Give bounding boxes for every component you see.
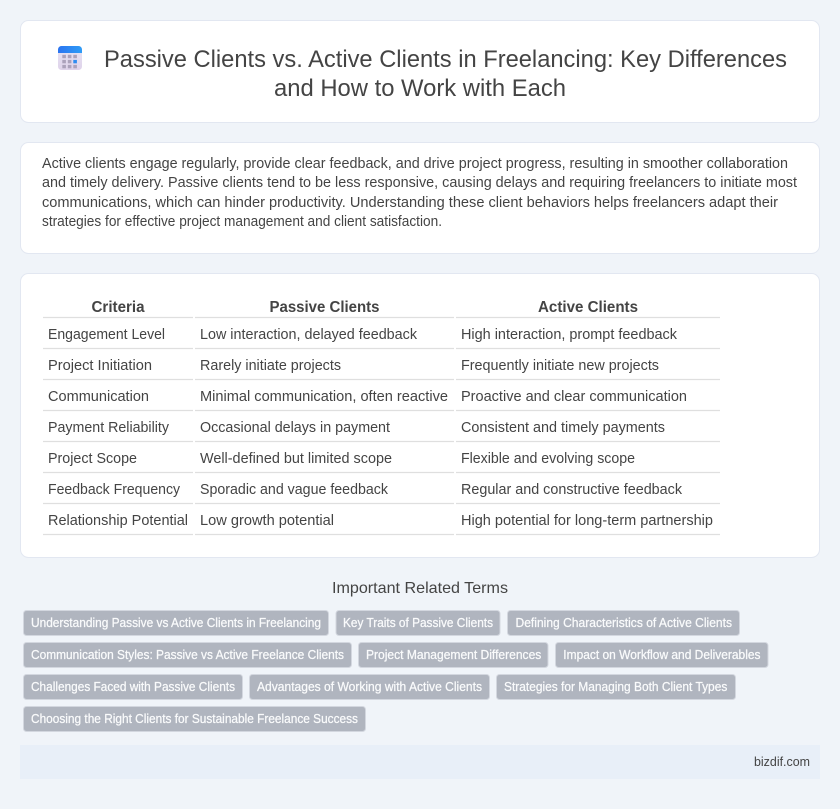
tag: Impact on Workflow and Deliverables — [563, 648, 760, 662]
row: project scope — [48, 451, 635, 467]
tag — [250, 674, 490, 700]
tag: Choosing the Right Clients for Sustainable Freelance Success — [31, 712, 358, 726]
row: communication: Communication — [48, 389, 149, 405]
table header: Passive Clients — [270, 299, 380, 316]
tag: Understanding Passive vs Active Clients in Freelancing — [31, 616, 321, 630]
panel: title header — [20, 20, 820, 122]
text block: introduction paragraph — [42, 156, 797, 230]
tag — [24, 674, 242, 700]
tag: Challenges Faced with Passive Clients — [31, 680, 235, 694]
row: relationship potential: High potential for long-term partnership — [461, 513, 713, 529]
row: relationship potential: Low growth potential — [200, 513, 334, 529]
tag group: related terms — [24, 610, 768, 732]
table header — [92, 299, 638, 316]
row: feedback frequency: Sporadic and vague feedback — [200, 482, 389, 498]
row: relationship potential: Relationship Potential — [48, 513, 188, 529]
table header: Active Clients — [538, 299, 638, 316]
row: communication — [48, 389, 687, 405]
row: project scope: Project Scope — [48, 451, 137, 467]
footer bar: bizdif.com — [754, 754, 810, 769]
row: engagement level: Engagement Level — [48, 327, 165, 343]
row: engagement level: High interaction, prompt feedback — [461, 327, 678, 343]
panel: introduction — [20, 142, 820, 254]
heading: important related terms: Important Related Terms — [332, 580, 508, 597]
row: engagement level — [48, 327, 678, 343]
tag — [24, 610, 328, 636]
tag — [508, 610, 740, 636]
text block: introduction paragraph: and timely delivery. Passive clients tend to be less responsive, causing delays and requiring freelancers to initiate most — [42, 175, 797, 191]
row: payment reliability: Consistent and timely payments — [461, 420, 665, 436]
row: project scope: Flexible and evolving scope — [461, 451, 635, 467]
tag: Key Traits of Passive Clients — [343, 616, 493, 630]
tag: Project Management Differences — [366, 648, 541, 662]
tag — [496, 674, 736, 700]
row: feedback frequency: Regular and constructive feedback — [461, 482, 683, 498]
title: and How to Work with Each — [274, 75, 566, 102]
tag: Strategies for Managing Both Client Types — [504, 680, 727, 694]
text block: introduction paragraph: Active clients engage regularly, provide clear feedback, and drive project progress, resulting in smoother collaboration — [42, 156, 788, 172]
title: Passive Clients vs. Active Clients in Freelancing: Key Differences — [104, 46, 787, 73]
title — [104, 46, 787, 102]
row: relationship potential — [48, 513, 713, 529]
row: feedback frequency — [48, 482, 683, 498]
row: project initiation: Rarely initiate projects — [200, 358, 341, 374]
tag — [556, 642, 768, 668]
row: communication: Proactive and clear communication — [461, 389, 687, 405]
row: payment reliability: Payment Reliability — [48, 420, 170, 436]
tag — [336, 610, 500, 636]
row: feedback frequency: Feedback Frequency — [48, 482, 181, 498]
row: project initiation: Project Initiation — [48, 358, 152, 374]
row: communication: Minimal communication, often reactive — [200, 389, 448, 405]
panel: comparison table — [20, 274, 820, 558]
tag: Advantages of Working with Active Clients — [257, 680, 482, 694]
row: project initiation — [48, 358, 659, 374]
footer bar — [20, 745, 820, 779]
row: engagement level: Low interaction, delayed feedback — [200, 327, 418, 343]
text block: introduction paragraph: communications, which can hinder productivity. Understanding these client behaviors helps freelancers adapt their — [42, 195, 778, 211]
tag: Defining Characteristics of Active Clients — [516, 616, 732, 630]
text block: introduction paragraph: strategies for effective project management and client satisfaction. — [42, 214, 442, 230]
tag — [24, 706, 366, 732]
tag — [24, 642, 352, 668]
tag — [358, 642, 548, 668]
row: payment reliability — [48, 420, 665, 436]
row: project scope: Well-defined but limited scope — [200, 451, 392, 467]
table header: Criteria — [92, 299, 145, 316]
tag: Communication Styles: Passive vs Active Freelance Clients — [31, 648, 344, 662]
icon: calendar — [58, 46, 82, 70]
row: project initiation: Frequently initiate new projects — [461, 358, 659, 374]
row: payment reliability: Occasional delays in payment — [200, 420, 390, 436]
